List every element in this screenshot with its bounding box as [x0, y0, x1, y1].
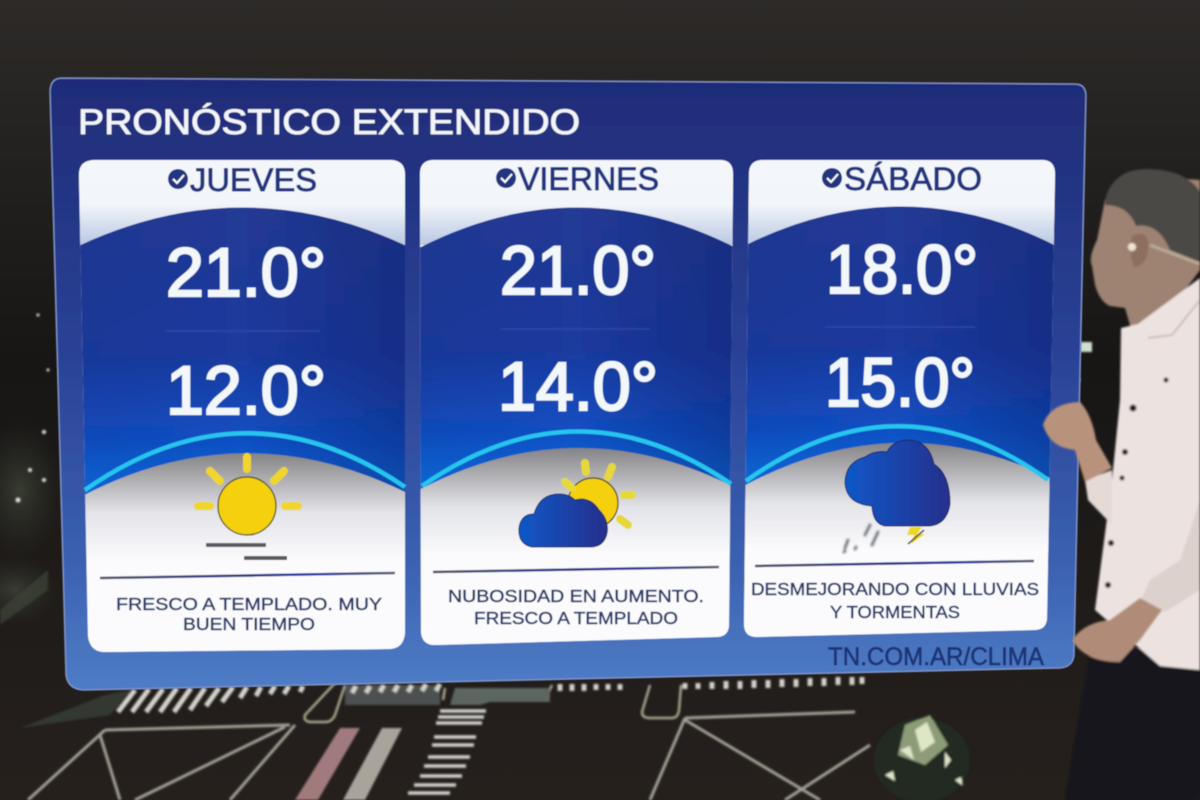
day heading: VIERNES	[518, 161, 659, 197]
icon: storm cloud	[844, 440, 950, 552]
max temperature: 18.0°	[826, 231, 978, 308]
day heading: JUEVES	[190, 162, 317, 198]
neck and face	[1091, 175, 1200, 332]
max temperature: 21.0°	[166, 234, 326, 311]
min temperature: 15.0°	[825, 344, 975, 421]
raised arm	[1043, 402, 1112, 525]
arc	[85, 433, 405, 490]
presenter	[1043, 169, 1200, 800]
caption: Y TORMENTAS	[830, 602, 960, 622]
caption	[116, 594, 382, 634]
min temperature: 14.0°	[498, 348, 658, 425]
icon: sun	[198, 457, 298, 558]
title: PRONÓSTICO EXTENDIDO	[78, 103, 580, 142]
caption: NUBOSIDAD EN AUMENTO.	[448, 586, 704, 606]
caption	[751, 579, 1039, 622]
min temperature: 12.0°	[166, 352, 326, 429]
panel: forecast board	[50, 78, 1086, 690]
card: viernes	[415, 155, 740, 655]
caption: DESMEJORANDO CON LLUVIAS	[751, 579, 1039, 599]
shirt	[1095, 278, 1200, 670]
hair	[1105, 169, 1200, 262]
lowered arm	[1072, 500, 1200, 662]
caption: BUEN TIEMPO	[183, 614, 315, 634]
card: jueves	[70, 155, 415, 660]
crosswalk stripes	[118, 677, 862, 793]
tree	[874, 715, 970, 800]
caption: FRESCO A TEMPLADO	[474, 608, 678, 628]
website url: TN.COM.AR/CLIMA	[828, 643, 1044, 671]
caption: FRESCO A TEMPLADO. MUY	[116, 594, 382, 614]
ear and earpiece	[1128, 234, 1200, 267]
trousers	[1065, 640, 1200, 800]
arc	[422, 431, 731, 486]
street below the board	[20, 677, 970, 800]
shirt buttons	[1105, 378, 1168, 588]
card: sabado	[740, 155, 1060, 650]
icon: sun and cloud	[519, 463, 632, 547]
caption	[448, 586, 704, 628]
separator	[433, 567, 719, 572]
arc	[746, 426, 1048, 481]
separator	[100, 573, 395, 578]
city lights	[0, 314, 1092, 625]
separator	[755, 561, 1034, 566]
max temperature: 21.0°	[500, 232, 656, 309]
day heading: SÁBADO	[844, 161, 982, 197]
